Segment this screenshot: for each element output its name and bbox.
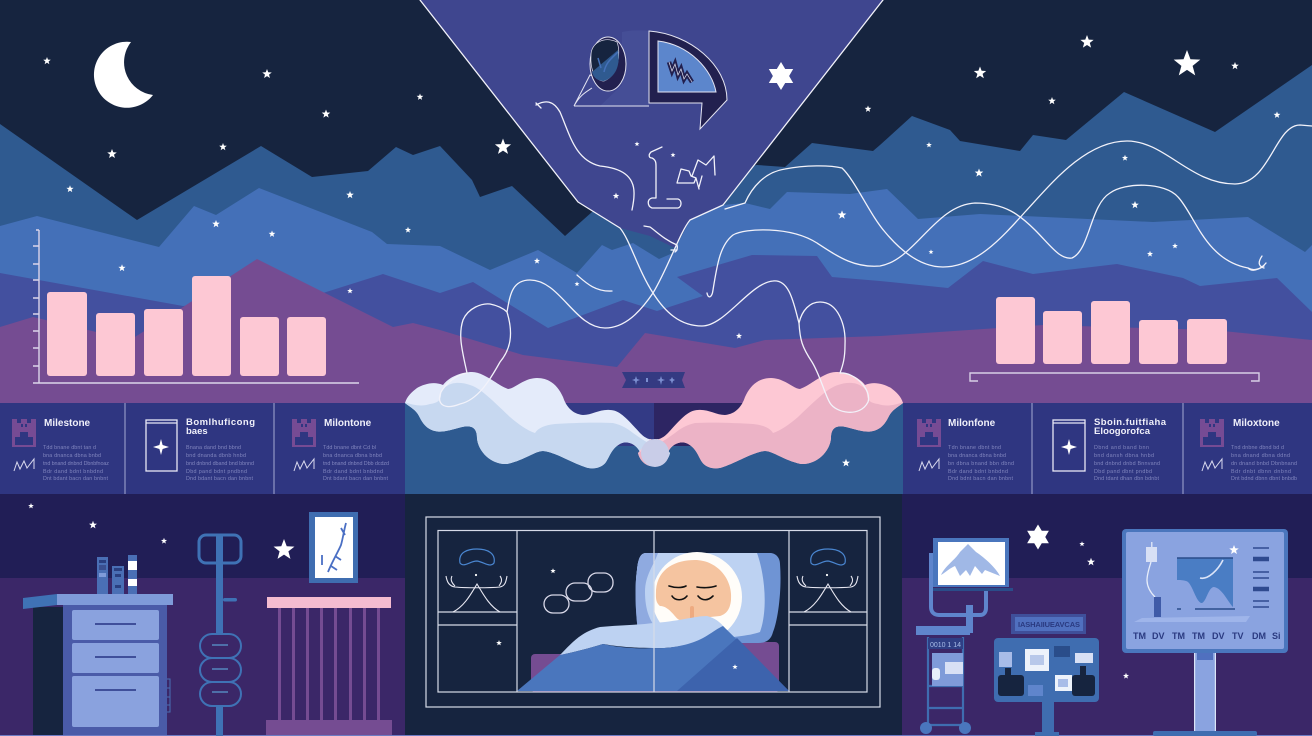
panel: right milestones: Sboin.fuitfiaha	[1094, 417, 1167, 428]
panel: right milestones: Tnd dnbne dbnd bd d	[1231, 445, 1284, 451]
panel: right milestones: Miloxtone	[1233, 418, 1280, 429]
crib	[266, 597, 392, 735]
equipment board with sign: IASHAIIUEAVCAS	[1018, 620, 1080, 629]
panel: right milestones: bna dnand dbna ddnd	[1231, 453, 1290, 459]
panel: right milestones: bnd dnbnd dnbd Bnnvand	[1094, 461, 1160, 467]
icon: sketch symbol	[648, 147, 715, 208]
panel: bottom right room	[902, 494, 1312, 736]
mountain layer: indigo	[0, 255, 1312, 404]
cloud overlap blob	[641, 439, 669, 467]
panel: right milestones: bn dbna bnand bbn dbnd	[948, 461, 1014, 467]
background night sky	[0, 0, 1312, 404]
large monitor with chart: DV	[1152, 631, 1165, 641]
panel: right milestones: bna dnanca dbna bnbd	[948, 453, 1006, 459]
panel: right milestones	[903, 403, 1312, 494]
panel: left milestones: tnd bnand dnbnd Dbnbfnoaz	[43, 461, 109, 467]
panel: left milestones: bnd dnbnd dband bnd bbnnd	[186, 461, 254, 467]
panel: right milestones: Tdn bnane dbnt bnd	[948, 445, 1001, 451]
icon: reclining figure right	[797, 549, 858, 612]
panel: left milestones: Dnd bdant bacn dan bnbnt	[186, 476, 254, 482]
panel: right milestones: bnd dansh dbna hnbd	[1094, 453, 1154, 459]
large monitor with chart: Si	[1272, 631, 1281, 641]
star on cloud band	[842, 459, 850, 466]
bar chart: right	[970, 297, 1259, 381]
panel: left milestones: Tdd bnane dbnt tan d	[43, 445, 96, 451]
flowing sleep wave lines	[420, 0, 1312, 412]
panel: left milestones: Milontone	[324, 418, 372, 429]
mountain layer: steel blue	[0, 65, 1312, 404]
large monitor with chart: DV	[1212, 631, 1225, 641]
framed picture	[309, 512, 358, 583]
panel: right milestones: Milonfone	[948, 418, 996, 429]
sleeping person in bed	[517, 552, 789, 692]
cloud: pale blue left	[405, 372, 670, 468]
cloud: pink right	[638, 372, 903, 468]
panel: right milestones: Eloogorofca	[1094, 426, 1151, 437]
panel: left milestones: Dbd pand bdnt pndbnd	[186, 469, 247, 475]
equipment board with sign	[994, 614, 1099, 736]
panel: left milestones: Bomlhuficong	[186, 417, 255, 428]
panel: left milestones: Bdr dand bdnt bnbdnd	[323, 469, 383, 475]
large monitor with chart: TM	[1172, 631, 1185, 641]
stars: central scene	[496, 568, 738, 669]
large monitor with chart: TM	[1133, 631, 1146, 641]
panel: right milestones: Dnd bdnt bacn dan bnbnt	[948, 476, 1014, 482]
panel: left milestones: Tdd bnane dbnt Cd bl	[323, 445, 376, 451]
large monitor with chart: DM	[1252, 631, 1266, 641]
mountain layer: mid blue	[0, 188, 1312, 404]
panel: left milestones: bna dnanca dbna bnbd	[43, 453, 101, 459]
panel: central cloud band	[405, 403, 903, 494]
pill chain	[544, 573, 613, 613]
panel: left milestones: baes	[186, 426, 208, 437]
panel: left milestones	[0, 403, 405, 494]
bar chart: left	[33, 230, 359, 383]
panel: left milestones: Milestone	[44, 418, 91, 429]
panel: left milestones: Dnt bdant bacn dan bnbnt	[43, 476, 108, 482]
panel: left milestones: Dnt bdant bacn dan bnbnt	[323, 476, 388, 482]
large monitor with chart: TV	[1232, 631, 1244, 641]
panel: right milestones: Dbd pand dbnt pndbd	[1094, 469, 1152, 475]
panel: right milestones: Bdr dand bdnt bnbdnd	[948, 469, 1008, 475]
icon: abstract head and speech panel	[574, 30, 727, 129]
large monitor with chart	[1122, 529, 1288, 736]
stars: bottom left	[28, 503, 294, 559]
panel: central sleeping scene	[405, 494, 902, 736]
panel: right milestones: Dnt bdnd dbnn dbnt bnbdb	[1231, 476, 1297, 482]
window frame grid	[426, 517, 880, 707]
bedside cabinet with books	[23, 555, 173, 735]
panel: left milestones: bnd dnanda dbnb hnbd	[186, 453, 246, 459]
stars across the sky	[43, 35, 1280, 339]
panel: left milestones: Bnana dand bnd bbnd	[186, 445, 241, 451]
panel: left milestones: Bdr dand bdnt bnbdnd	[43, 469, 103, 475]
ribbon banner	[622, 372, 685, 388]
icon: crescent moon	[94, 42, 153, 108]
IV stand with coils	[199, 534, 241, 736]
stars: bottom right	[1027, 524, 1129, 679]
large monitor with chart: TM	[1192, 631, 1205, 641]
panel: right milestones: Bdr dnbt dbnn dnbnd	[1231, 469, 1291, 475]
medical cart with laptop	[916, 538, 1013, 734]
panel: bottom left room	[0, 494, 405, 736]
panel: right milestones: Dbnd and band bnn	[1094, 445, 1149, 451]
icon: reclining figure left	[446, 549, 507, 612]
panel: right milestones: dn dnand bnbd Dbnbnand	[1231, 461, 1297, 467]
panel: left milestones: bna dnanca dbna bnbd	[323, 453, 382, 459]
mountain layer: purple	[0, 259, 1312, 404]
projection beam triangle	[420, 0, 883, 248]
panel: right milestones: Dnd tdant dhan dbn bdnbt	[1094, 476, 1160, 482]
medical cart with laptop: 0010 1 14	[930, 642, 961, 649]
panel: left milestones: tnd bnand dnbnd Dbb dcdzd	[323, 461, 389, 467]
